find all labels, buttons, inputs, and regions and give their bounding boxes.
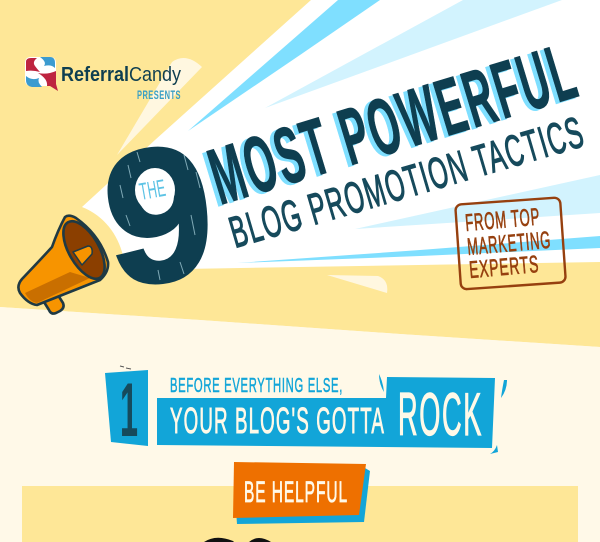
label: be helpful: BE HELPFUL <box>244 476 348 509</box>
stamp: from top marketing experts: EXPERTS <box>468 251 540 284</box>
numeral 9 counter <box>135 168 175 212</box>
stamp: from top marketing experts <box>455 197 566 290</box>
megaphone body shade <box>25 272 90 303</box>
label: be helpful <box>233 462 370 524</box>
megaphone handle <box>44 292 64 314</box>
background: yellow header band <box>0 0 600 347</box>
megaphone icon <box>18 215 113 314</box>
THE label: THE <box>137 175 168 206</box>
background: cream section <box>0 307 600 542</box>
banner: your blog's gotta rock <box>157 374 507 454</box>
megaphone body <box>18 216 108 305</box>
presents label: PRESENTS <box>137 88 181 102</box>
logo wordmark: ReferralCandy <box>61 64 181 86</box>
decorative shard: lower right <box>327 275 387 293</box>
numeral 9 scratch texture <box>120 152 200 280</box>
logo: ReferralCandy <box>25 57 181 102</box>
banner: your blog's gotta rock: YOUR BLOG'S GOTTA <box>170 400 385 441</box>
banner: your blog's gotta rock: ROCK <box>398 381 483 448</box>
megaphone bell inner <box>55 215 113 285</box>
panel: yellow content panel <box>22 486 578 542</box>
section number 1 tag: 1 <box>120 368 138 453</box>
heading: before everything else: BEFORE EVERYTHING ELSE, <box>170 375 343 397</box>
icon: candy swirl <box>25 57 58 91</box>
megaphone driver <box>73 246 92 265</box>
section number 1 tag <box>105 366 148 453</box>
stamp: from top marketing experts: FROM TOP <box>464 204 541 237</box>
megaphone sound burst <box>82 0 600 270</box>
icon: black moustache top <box>204 538 271 542</box>
big numeral 9: 9 <box>94 105 224 327</box>
decorative shard: upper left <box>117 58 202 155</box>
